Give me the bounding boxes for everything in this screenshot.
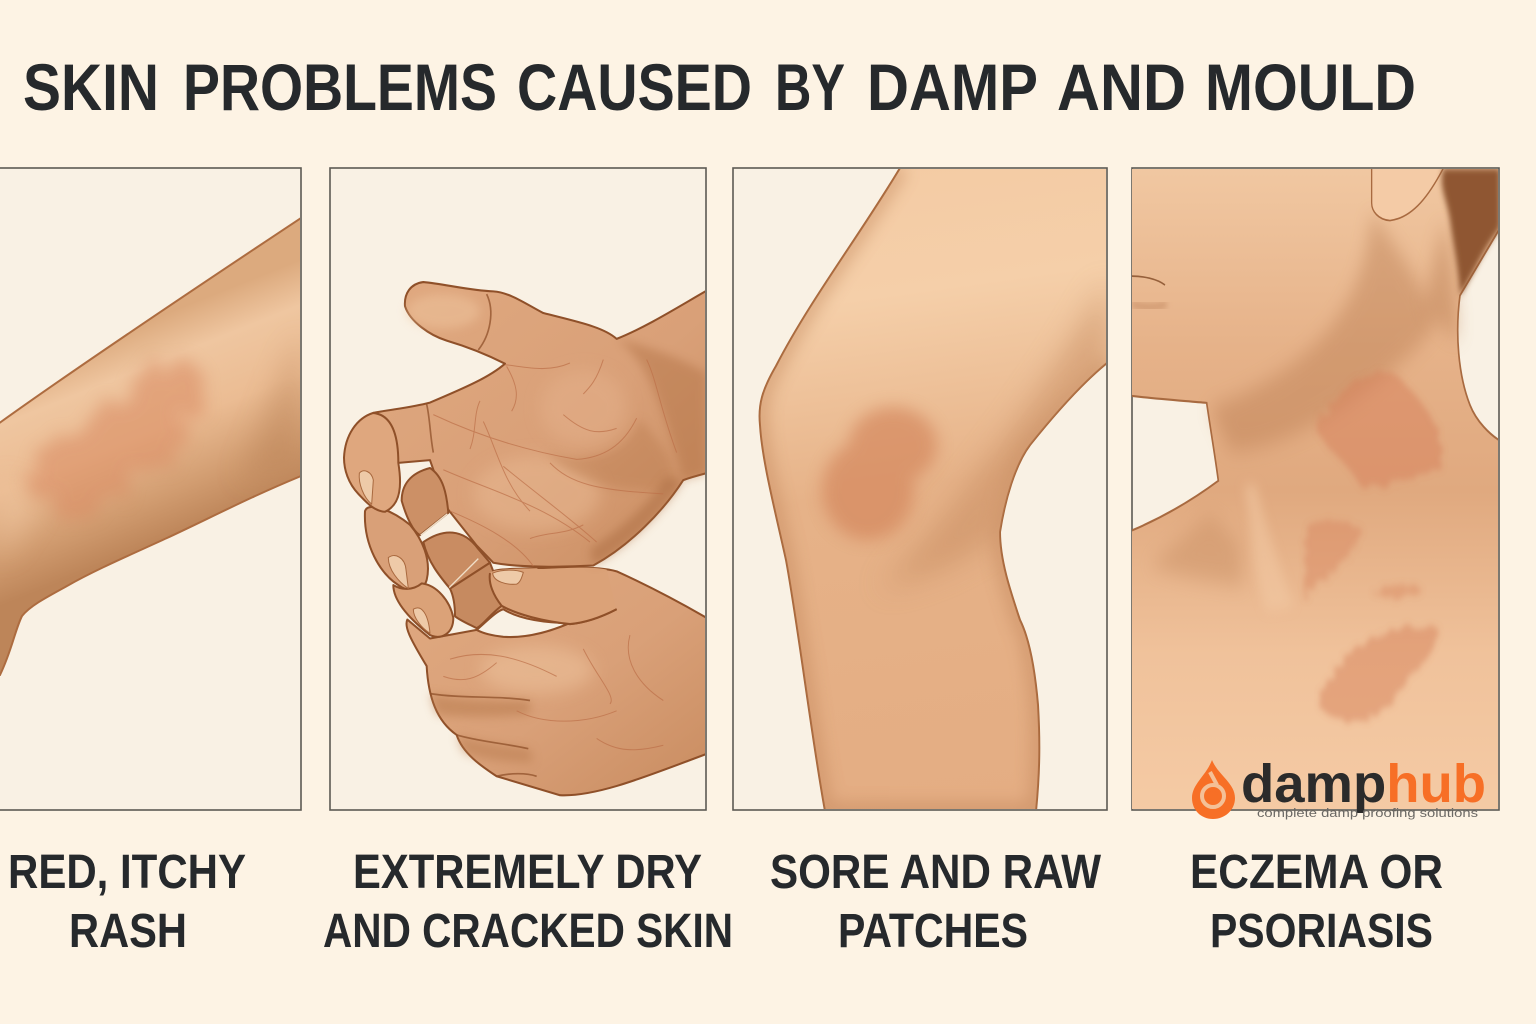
title: CAUSED — [517, 50, 752, 124]
panel: sore and raw patches — [733, 168, 1107, 811]
thumb outline redraw — [490, 568, 617, 624]
lower thumb — [538, 568, 607, 570]
caption: sore and raw patches: SORE AND RAW — [770, 846, 1102, 899]
neck and face skin — [1130, 165, 1500, 818]
fingers — [402, 468, 448, 535]
upper hand shading — [407, 294, 707, 565]
caption: sore and raw patches — [770, 846, 1102, 958]
wordmark: damphub — [1241, 754, 1486, 814]
caption: extremely dry and cracked skin — [323, 846, 733, 958]
panel: red itchy rash — [0, 168, 301, 810]
hair — [1442, 168, 1500, 296]
upper hand and wrist — [373, 282, 707, 567]
caption: extremely dry and cracked skin: AND CRACKED SKIN — [323, 905, 733, 958]
caption: sore and raw patches: PATCHES — [838, 905, 1028, 958]
skin cracks — [433, 360, 677, 750]
rash patches — [1303, 373, 1442, 722]
jaw shadow — [1210, 211, 1437, 451]
title: MOULD — [1205, 50, 1416, 124]
caption: extremely dry and cracked skin: EXTREMELY DRY — [353, 846, 702, 899]
fingernails — [359, 471, 523, 633]
raw skin patch — [822, 407, 937, 540]
title — [23, 50, 1416, 124]
lower hand shading — [430, 645, 593, 762]
tagline: complete damp proofing solutions — [1257, 808, 1478, 820]
caption: red itchy rash — [8, 846, 246, 958]
caption: eczema or psoriasis — [1190, 846, 1443, 958]
caption: eczema or psoriasis: PSORIASIS — [1210, 905, 1433, 958]
finger gaps — [421, 514, 478, 588]
gap between thumb and palm — [477, 609, 570, 637]
title: SKIN — [23, 50, 159, 124]
caption: eczema or psoriasis: ECZEMA OR — [1190, 846, 1443, 899]
title: DAMP — [867, 50, 1038, 124]
arm edge shading — [760, 168, 1107, 811]
panel: extremely dry and cracked skin — [330, 168, 707, 810]
logo: damphub — [1192, 754, 1486, 820]
rash patch — [26, 360, 208, 527]
ear — [1372, 165, 1445, 221]
panel: eczema or psoriasis — [1130, 165, 1500, 818]
caption: red itchy rash: RASH — [69, 905, 187, 958]
lower hand — [406, 567, 707, 795]
title: AND — [1057, 50, 1186, 124]
title: BY — [775, 50, 845, 124]
lip line — [1132, 276, 1165, 285]
illustration: upper and lower hands — [344, 282, 707, 795]
caption: red itchy rash: RED, ITCHY — [8, 846, 246, 899]
title: PROBLEMS — [183, 50, 497, 124]
icon: orange droplet — [1192, 760, 1235, 819]
